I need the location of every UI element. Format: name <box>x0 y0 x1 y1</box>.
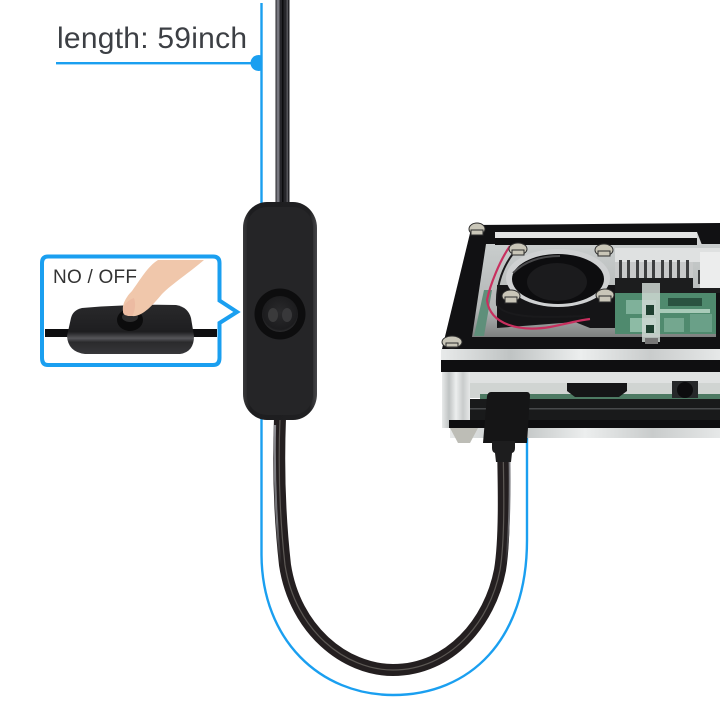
fan mount block <box>497 285 615 328</box>
lower cable <box>275 418 510 670</box>
fan wires <box>487 246 590 329</box>
switch body <box>243 202 317 420</box>
acrylic tab <box>642 283 660 344</box>
power jack <box>672 381 698 398</box>
length pointer with dot <box>56 55 266 71</box>
length label: length: 59inch <box>57 22 247 55</box>
case layers <box>441 349 720 443</box>
mini switch <box>67 305 194 354</box>
callout label: NO / OFF <box>53 267 137 288</box>
upper cable <box>276 0 290 206</box>
callout frame <box>42 256 237 365</box>
switch button <box>254 288 306 340</box>
raspberry pi case <box>441 223 720 443</box>
screws <box>442 223 614 348</box>
fan <box>506 249 610 307</box>
length measurement line <box>262 3 527 695</box>
case window <box>472 244 720 337</box>
interior green sliver <box>474 290 492 336</box>
usb plug <box>483 392 530 462</box>
heatsink pins <box>615 248 720 294</box>
hdmi port <box>567 383 627 397</box>
mini cable <box>45 329 217 337</box>
finger <box>123 260 204 316</box>
case top plate <box>442 223 720 349</box>
callout: on / off <box>42 256 237 365</box>
top slot <box>495 232 702 245</box>
green circuit board <box>615 293 720 337</box>
mini button <box>117 309 143 331</box>
inline switch <box>243 202 317 420</box>
